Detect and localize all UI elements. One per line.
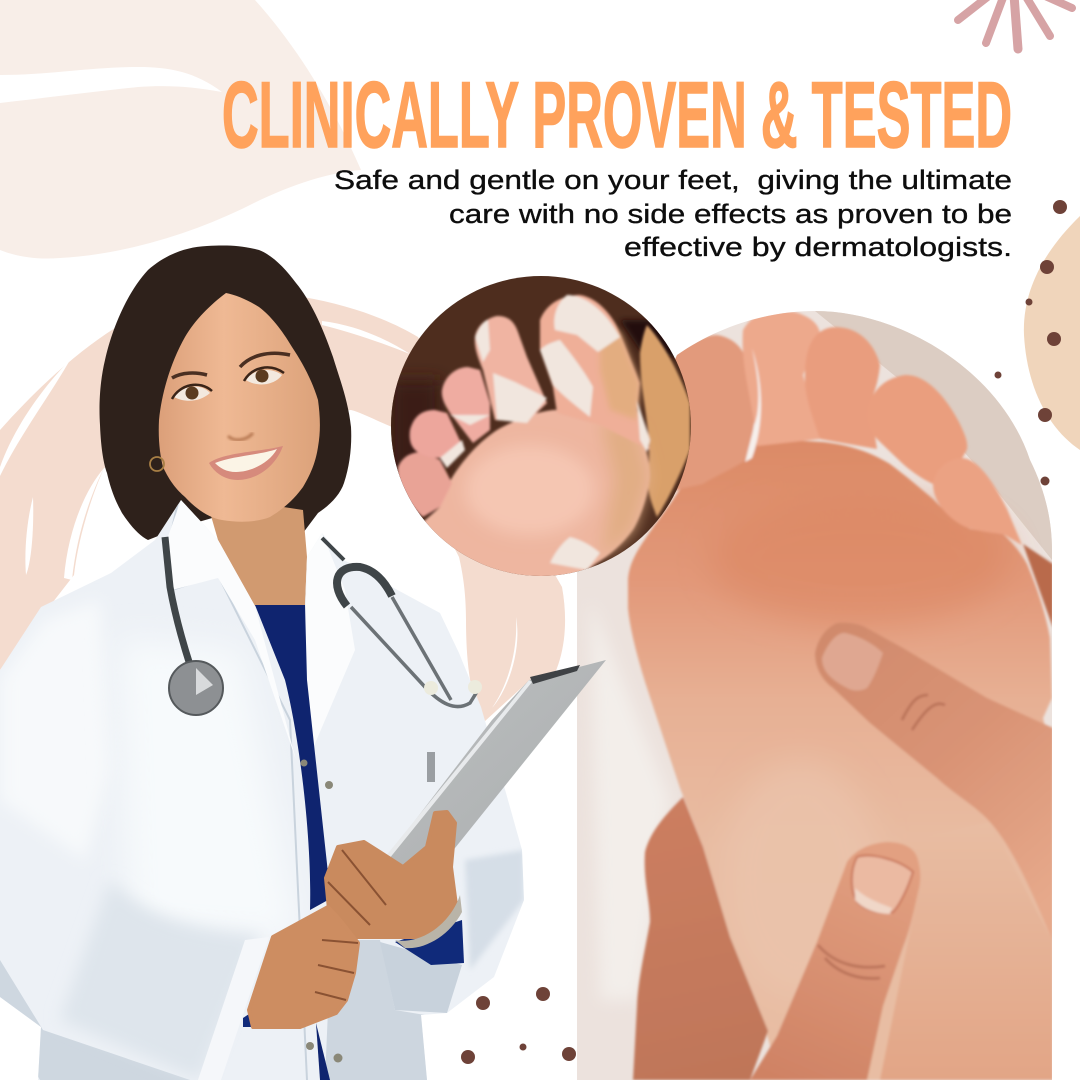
neck: [205, 495, 307, 606]
decorative blob: top left: [0, 0, 361, 259]
body text: care with no side effects as proven to be: [449, 199, 1012, 229]
decorative dots: bottom: [461, 987, 576, 1064]
face: [150, 293, 320, 522]
photo: doctor: [0, 245, 606, 1080]
decorative sunburst: top right: [958, 0, 1072, 49]
photo: peeling foot in circle: [380, 276, 692, 590]
blue scrub top: [255, 605, 328, 910]
toes: [665, 311, 1022, 545]
fingers, lower left: [633, 797, 768, 1080]
body text: effective by dermatologists.: [624, 232, 1012, 262]
hands: [249, 812, 457, 1027]
sole of the foot: [628, 439, 1053, 1080]
thumb, lower centre: [750, 842, 920, 1080]
decorative dots: right: [994, 200, 1067, 486]
right toe edge: [640, 325, 690, 517]
nose: [228, 433, 253, 440]
eyes: [174, 386, 210, 401]
body text: [334, 165, 1012, 262]
earring: [150, 457, 164, 471]
finger at right edge: [1023, 544, 1053, 628]
stethoscope: [165, 537, 482, 715]
body text: Safe and gentle on your feet, giving the ultimate: [334, 165, 1012, 195]
eyebrows: [172, 373, 207, 378]
sole: [424, 408, 651, 576]
hand with thumb, upper right: [815, 623, 1053, 942]
toes: [398, 295, 650, 517]
hair: [100, 245, 351, 540]
decorative blob: right edge: [1024, 216, 1080, 450]
peeling skin: [440, 295, 650, 570]
coat buttons: [300, 752, 435, 1062]
palm, lower right: [880, 898, 1052, 1080]
photo: foot held by hands: [577, 300, 1057, 1080]
clipboard: [385, 660, 606, 867]
smile: [209, 446, 283, 480]
watch: [395, 895, 462, 948]
lab coat: [0, 500, 524, 1080]
decorative brush stroke: behind doctor: [0, 297, 565, 722]
